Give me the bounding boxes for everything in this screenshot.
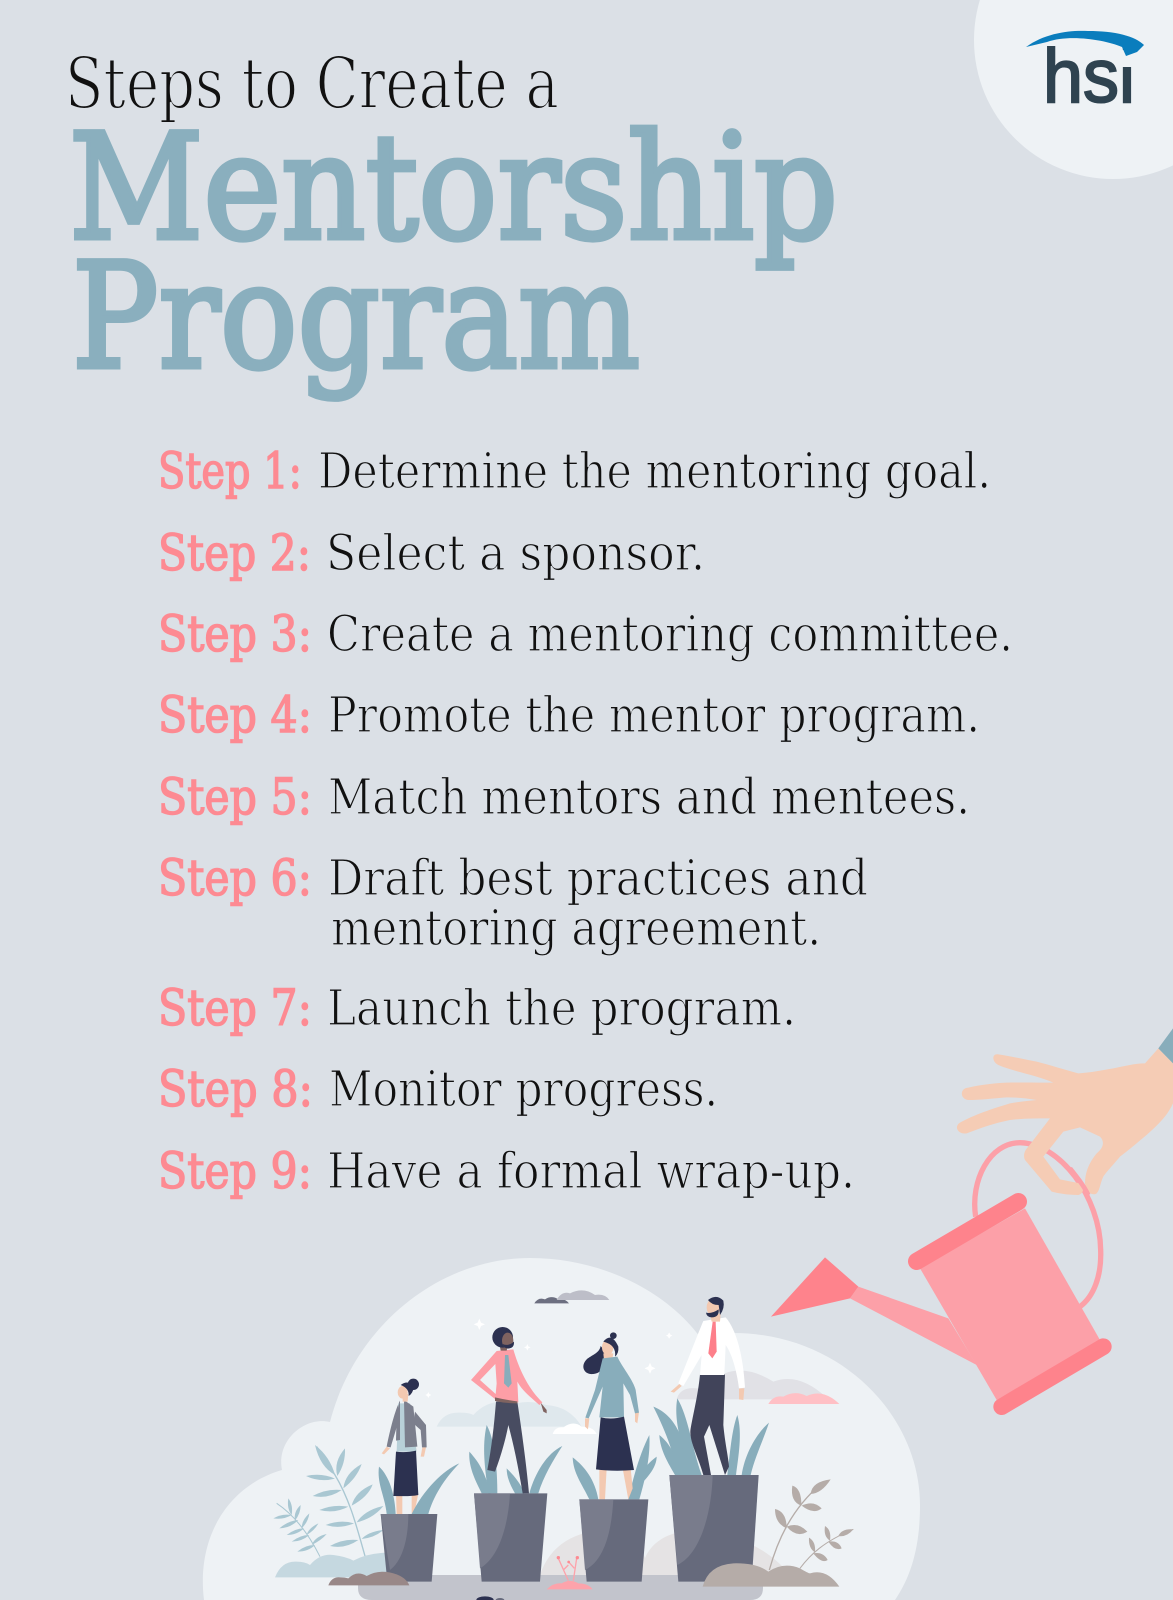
title line: Steps to Create a: Steps to Create a — [65, 42, 559, 125]
illustration backdrop cloud — [203, 1258, 920, 1600]
handle over thumb — [1070, 1168, 1088, 1195]
step 9 — [158, 1142, 855, 1200]
step 6: mentoring agreement. — [331, 899, 821, 957]
step 6 — [158, 849, 868, 957]
watering can and hand (local zoom coordinates) — [771, 1028, 1173, 1407]
can spout — [850, 1287, 977, 1365]
step 4 — [158, 686, 980, 744]
step 1: Step 1: — [158, 442, 302, 500]
right plants — [703, 1479, 853, 1587]
step 2 — [158, 524, 705, 582]
sparkles right — [645, 1333, 672, 1374]
hand — [957, 1048, 1173, 1195]
step 7 — [158, 979, 796, 1037]
light blue mound — [275, 1553, 387, 1577]
brown mound — [328, 1572, 409, 1585]
sleeve — [1158, 1028, 1173, 1063]
can handle — [975, 1143, 1101, 1307]
sparkles — [425, 1319, 672, 1398]
step 3: Create a mentoring committee. — [327, 605, 1013, 663]
step 9: Have a formal wrap-up. — [327, 1142, 855, 1200]
person 3: woman in teal sweater — [573, 1332, 657, 1499]
person 2: man in pink shirt — [469, 1327, 562, 1493]
logo blue arc — [1026, 31, 1144, 56]
step 7: Step 7: — [158, 979, 312, 1037]
step 8: Step 8: — [158, 1060, 313, 1118]
step 5: Match mentors and mentees. — [328, 768, 970, 826]
big fern — [306, 1445, 383, 1556]
can top rim — [917, 1202, 1018, 1261]
step 1: Determine the mentoring goal. — [318, 442, 991, 500]
step 8: Monitor progress. — [329, 1060, 718, 1118]
person 1: woman in gray jacket — [379, 1379, 427, 1514]
ground and background mounds — [358, 1530, 790, 1600]
step 8 — [158, 1060, 718, 1118]
step 9: Step 9: — [158, 1142, 312, 1200]
step 6: Draft best practices and — [328, 849, 868, 907]
pot 4 — [669, 1475, 759, 1582]
step 6: Step 6: — [158, 849, 312, 907]
plant small — [800, 1526, 853, 1568]
steps list — [158, 442, 1013, 1200]
step 2: Step 2: — [158, 524, 311, 582]
can body — [920, 1208, 1100, 1400]
bottom edge shapes — [476, 1596, 504, 1600]
can bottom rim — [1002, 1347, 1103, 1407]
logo wordmark: hsi — [1043, 34, 1135, 119]
step 2: Select a sponsor. — [326, 524, 705, 582]
step 4: Step 4: — [158, 686, 312, 744]
step 3: Step 3: — [158, 605, 312, 663]
step 5: Step 5: — [158, 768, 312, 826]
title line: Mentorship: Mentorship — [69, 103, 838, 273]
right side of illustration (local zoom coordinates) — [645, 1297, 853, 1587]
left foliage, pots and people (local zoom coordinates) — [273, 1290, 672, 1600]
pot 2 — [474, 1493, 547, 1582]
logo patch hiding the i dot — [1116, 50, 1138, 67]
can nozzle — [771, 1257, 858, 1317]
clouds behind figures — [437, 1290, 609, 1434]
logo panel: circle with hsi logo — [974, 0, 1173, 179]
title line: Program: Program — [72, 232, 640, 402]
pot 1 with plant — [381, 1463, 459, 1582]
right mound — [703, 1563, 839, 1587]
step 7: Launch the program. — [327, 979, 796, 1037]
title — [65, 42, 838, 402]
person 4: man in white shirt — [653, 1297, 769, 1475]
pink sprig and mound — [547, 1556, 593, 1589]
small fern — [273, 1498, 327, 1557]
clouds right — [677, 1371, 839, 1404]
pot 3 — [579, 1499, 648, 1582]
plant large — [769, 1479, 831, 1570]
step 4: Promote the mentor program. — [328, 686, 980, 744]
